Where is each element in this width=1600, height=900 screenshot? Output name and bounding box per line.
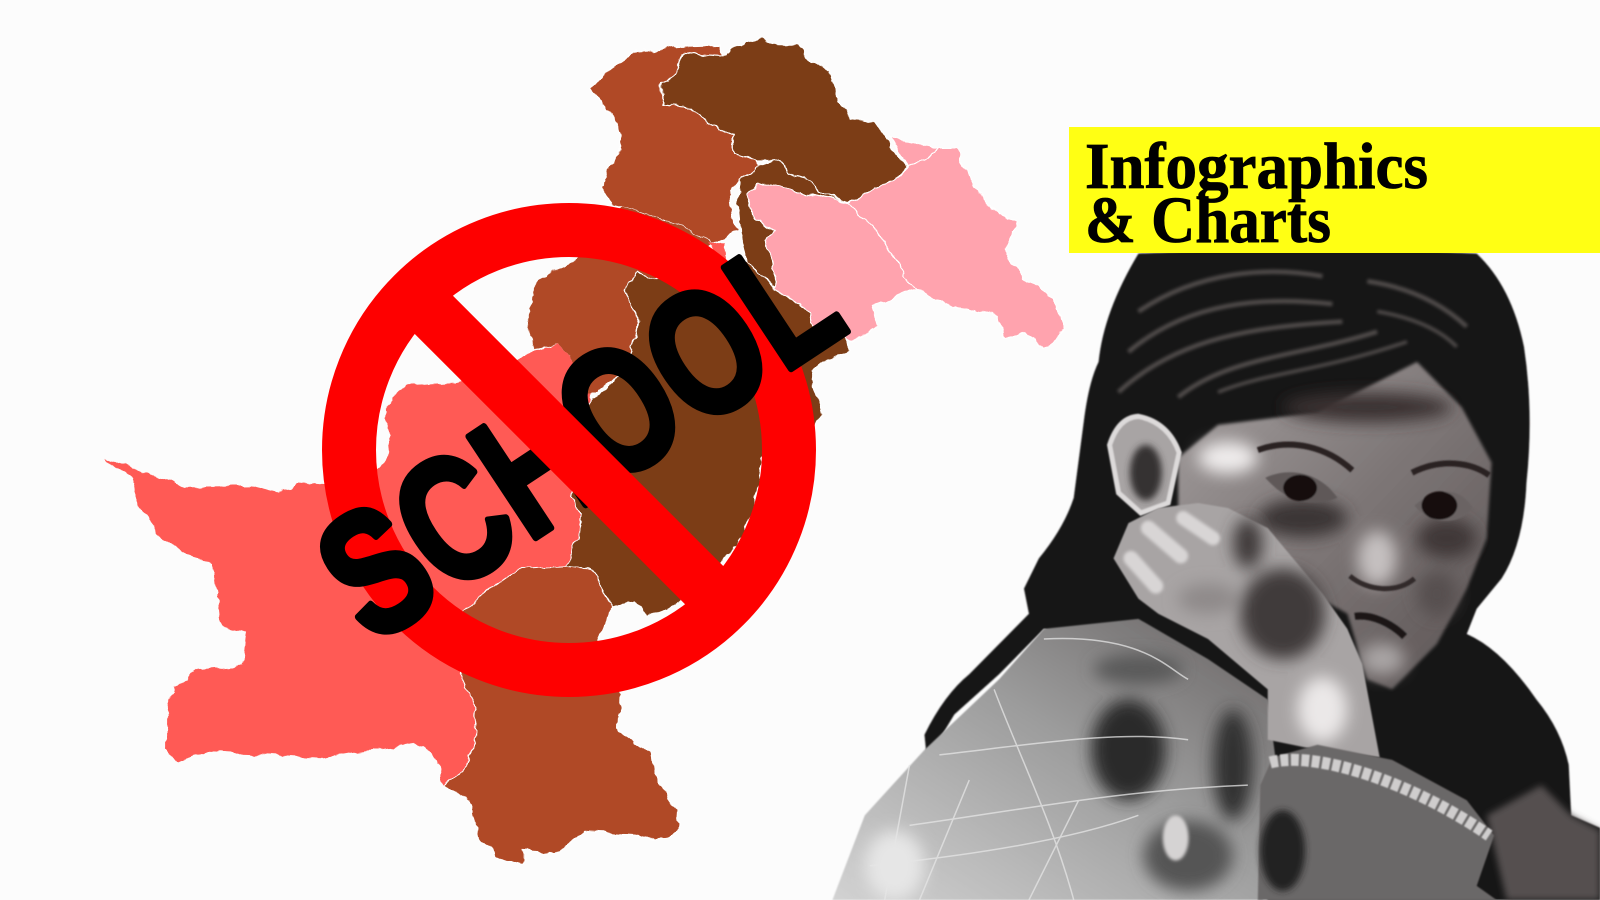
region: Khyber Pakhtunkhwa [590, 46, 759, 245]
embroidery [1163, 815, 1189, 861]
face shading [1198, 392, 1477, 675]
map of Pakistan [104, 38, 1065, 864]
knuckles [1131, 518, 1213, 586]
sleeve shadow [1260, 810, 1305, 891]
region: Kashmir north tip [890, 135, 938, 168]
photo: girl resting cheek on hand [832, 250, 1600, 900]
region: Kashmir east [849, 149, 1065, 349]
hair [924, 250, 1600, 900]
shirt [832, 619, 1278, 900]
region: Balochistan [104, 344, 590, 785]
region: Kashmir west [747, 182, 916, 341]
banner [1069, 127, 1600, 257]
hair highlights [1118, 272, 1467, 397]
ear [1110, 416, 1179, 513]
region: Sindh [444, 566, 678, 864]
sleeve cuff [1258, 745, 1497, 900]
face [1178, 362, 1492, 689]
banner title: Infographics [1085, 130, 1428, 203]
word: SCHOOL: SCHOOL [285, 197, 872, 678]
region: Gilgit-Baltistan [662, 38, 907, 203]
prohibition ring [349, 230, 789, 670]
banner title: & Charts [1085, 184, 1331, 257]
prohibition bar [413, 294, 725, 606]
hand and forearm [1114, 503, 1380, 757]
region: Punjab [565, 261, 850, 618]
banner background [1069, 127, 1600, 253]
shirt shadows [865, 654, 1253, 900]
eyes and brows [1258, 445, 1489, 636]
region: Khyber Pakhtunkhwa south [526, 206, 711, 393]
shirt stripes [870, 639, 1248, 900]
clothing lower right [1487, 785, 1600, 900]
hand shading [1178, 518, 1347, 742]
ear inner [1130, 445, 1162, 500]
region: strip [737, 160, 849, 289]
cuff fringe [1270, 760, 1489, 835]
region: Islamabad [708, 242, 727, 261]
